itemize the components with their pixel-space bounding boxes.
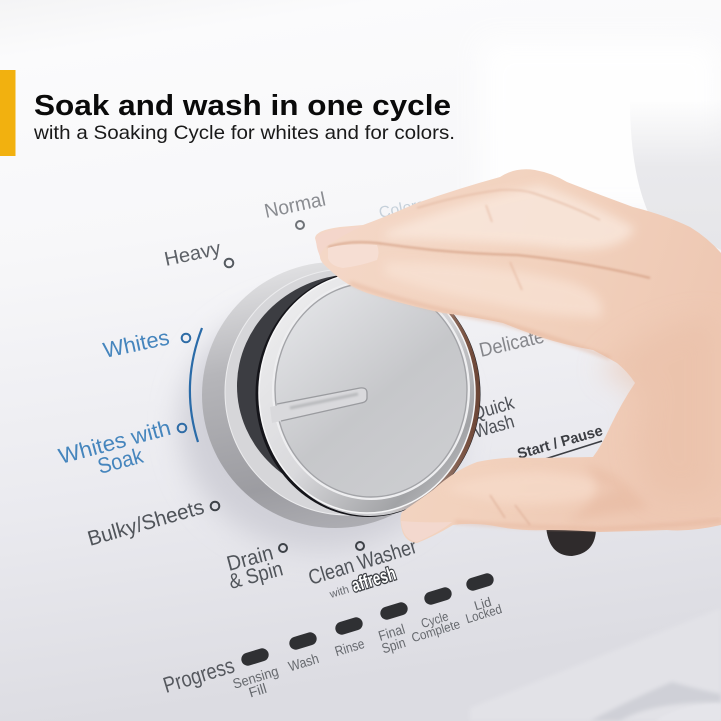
label: Sensing: Sensing bbox=[231, 663, 280, 692]
yellow accent bar bbox=[0, 70, 16, 156]
knob drop shadow bbox=[180, 300, 460, 550]
chrome knob rim bbox=[259, 273, 475, 513]
index finger highlight bbox=[385, 262, 602, 318]
label: Wash: Wash bbox=[472, 411, 517, 443]
dark knurled gap bbox=[237, 274, 477, 498]
label: Fill: Fill bbox=[247, 680, 268, 700]
label: Complete: Complete bbox=[410, 616, 462, 645]
knob face bbox=[275, 283, 467, 497]
progress light: Rinse bbox=[334, 616, 364, 636]
label: and Spin: & Spin bbox=[226, 557, 285, 594]
label: Progress: Progress bbox=[160, 653, 237, 698]
indicator: Bulky/Sheets bbox=[211, 502, 219, 510]
indicator: Normal bbox=[296, 221, 304, 229]
cycle selector knob bbox=[202, 262, 480, 528]
thumb highlight bbox=[445, 472, 620, 504]
finger separation crease bbox=[328, 242, 650, 278]
label: Whites with: Whites with bbox=[56, 415, 173, 469]
thin black knob edge bbox=[256, 271, 480, 517]
label: Locked: Locked bbox=[464, 601, 504, 626]
label: Start / Pause: Start / Pause bbox=[515, 422, 605, 463]
pointer inner groove bbox=[290, 394, 358, 408]
dial labels bbox=[56, 188, 605, 601]
thumb nail bbox=[401, 521, 452, 542]
thumb underside shadow bbox=[455, 520, 721, 529]
hand gripping knob bbox=[315, 169, 721, 543]
label: Heavy: Heavy bbox=[162, 238, 223, 271]
pointer outline top bbox=[277, 388, 367, 421]
knuckle crease marks bbox=[486, 205, 522, 290]
progress light: Final Spin bbox=[379, 601, 409, 621]
label: Clean Washer: Clean Washer bbox=[306, 535, 420, 590]
upper finger crease bbox=[417, 190, 600, 220]
label: Lid: Lid bbox=[472, 594, 493, 613]
label: Soak: Soak bbox=[95, 443, 147, 479]
soak cycle blue arc bbox=[190, 328, 202, 442]
label: Delicate: Delicate bbox=[477, 326, 546, 362]
upper finger highlight bbox=[385, 185, 635, 249]
knob side with brown reflection bbox=[260, 272, 480, 516]
indicator: Clean Washer bbox=[356, 542, 364, 550]
right side bright panel area bbox=[480, 40, 720, 210]
title: Soak and wash in one cycle bbox=[34, 90, 451, 122]
label: Rinse: Rinse bbox=[333, 635, 366, 659]
label: Drain: Drain bbox=[224, 541, 276, 576]
thumb creases bbox=[490, 495, 530, 525]
thumb base shadow bbox=[565, 465, 648, 522]
label: Final: Final bbox=[376, 621, 407, 644]
progress light: Cycle Complete bbox=[423, 586, 453, 606]
label: Normal: Normal bbox=[262, 188, 328, 223]
label: Whites: Whites bbox=[101, 325, 172, 363]
logo: affresh: affresh bbox=[349, 564, 398, 597]
index fingernail bbox=[328, 244, 378, 268]
label: Wash light: Wash bbox=[286, 650, 321, 674]
label: Cycle: Cycle bbox=[419, 608, 450, 631]
hand silhouette bbox=[315, 169, 721, 543]
indicator: Drain and Spin bbox=[279, 544, 287, 552]
label: Quick: Quick bbox=[470, 393, 517, 425]
start pause underline bbox=[545, 441, 602, 459]
knob face highlight rim bbox=[272, 280, 470, 500]
start button bbox=[546, 525, 596, 556]
knob pointer bbox=[270, 388, 367, 423]
finger underside shadow bbox=[350, 283, 610, 358]
lower panel band bbox=[470, 608, 721, 721]
progress light: Wash bbox=[288, 631, 318, 651]
progress light: Lid Locked bbox=[465, 572, 495, 592]
bottom right panel seam and lid bbox=[470, 608, 721, 721]
indicator: Whites bbox=[182, 334, 190, 342]
indicator: Whites with Soak bbox=[178, 424, 186, 432]
label: with: with bbox=[327, 584, 351, 601]
palm shading bbox=[600, 320, 715, 495]
label: Bulky/Sheets: Bulky/Sheets bbox=[85, 496, 207, 551]
label: Colors (partly hidden): Colors bbox=[378, 196, 426, 222]
progress light: Sensing Fill bbox=[240, 647, 270, 667]
lid shadow bbox=[590, 682, 721, 721]
label: Spin: Spin bbox=[380, 634, 407, 656]
top right grey backdrop bbox=[630, 100, 721, 250]
progress lights bbox=[160, 572, 504, 700]
middle fingertip nail bbox=[316, 226, 362, 256]
indicator: Heavy bbox=[225, 259, 233, 267]
bezel inner ring bbox=[225, 269, 469, 515]
lid surface bbox=[655, 704, 721, 721]
subtitle: with a Soaking Cycle for whites and for colors. bbox=[33, 122, 455, 144]
knob outer bezel bbox=[202, 262, 468, 528]
